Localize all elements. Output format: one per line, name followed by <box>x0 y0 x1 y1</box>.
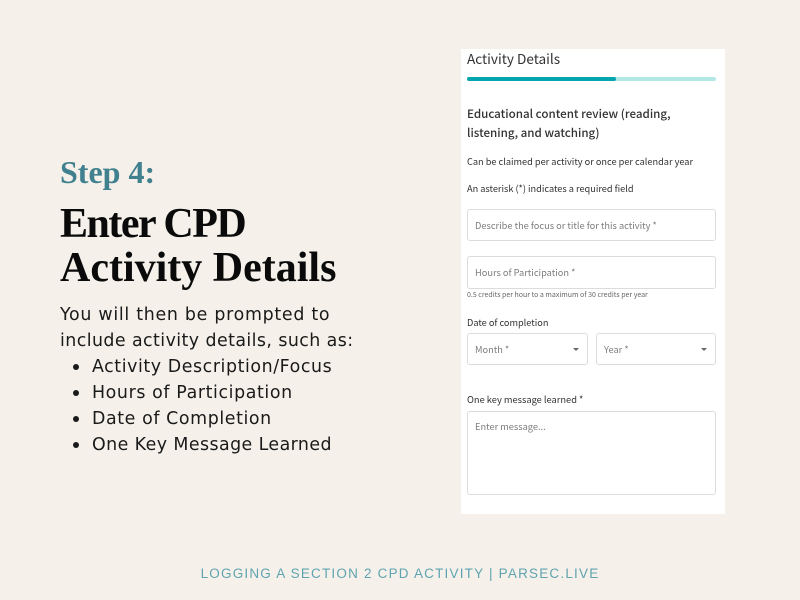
required note: An asterisk (*) indicates a required field <box>467 181 634 195</box>
intro text: You will then be prompted to <box>60 305 330 325</box>
claim note: Can be claimed per activity or once per calendar year <box>467 154 693 168</box>
form title: Activity Details <box>467 48 560 68</box>
main heading: Activity Details <box>60 244 336 290</box>
message label: One key message learned * <box>467 392 583 406</box>
message textarea <box>467 411 716 495</box>
main heading: Enter CPD <box>60 201 245 247</box>
progress bar <box>467 77 716 81</box>
footer: LOGGING A SECTION 2 CPD ACTIVITY | PARSEC.LIVE <box>201 566 599 581</box>
panel: activity details form screenshot <box>461 49 725 514</box>
step label: Step 4: <box>60 154 155 190</box>
date label: Date of completion <box>467 315 548 329</box>
bullet list <box>73 357 332 455</box>
bullet list: Hours of Participation <box>92 383 293 403</box>
credits hint: 0.5 credits per hour to a maximum of 30 credits per year <box>467 290 648 300</box>
focus input <box>467 209 716 241</box>
intro text <box>60 305 354 351</box>
message textarea: Enter message... <box>475 419 546 433</box>
intro text: include activity details, such as: <box>60 331 354 351</box>
year select <box>596 333 716 365</box>
focus input: Describe the focus or title for this activity * <box>475 218 657 232</box>
form subheading <box>467 106 671 140</box>
month select <box>467 333 588 365</box>
form subheading: Educational content review (reading, <box>467 106 671 122</box>
hours input <box>467 256 716 289</box>
hours input: Hours of Participation * <box>475 265 575 279</box>
bullet list: Activity Description/Focus <box>92 357 332 377</box>
bullet list: One Key Message Learned <box>92 435 332 455</box>
main heading <box>60 201 336 290</box>
year select: Year * <box>604 342 629 356</box>
month select: Month * <box>475 342 509 356</box>
form subheading: listening, and watching) <box>467 124 600 140</box>
bullet list: Date of Completion <box>92 409 272 429</box>
